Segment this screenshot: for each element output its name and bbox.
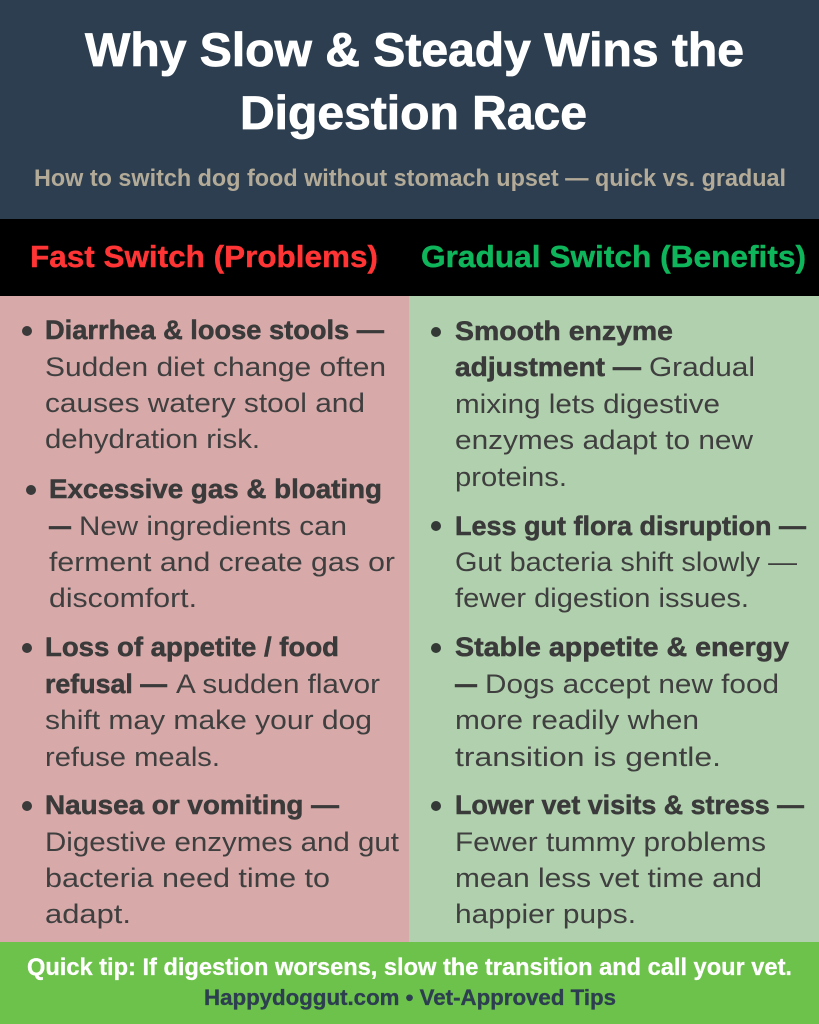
item: enzyme adjustment: enzymes adapt to new	[455, 425, 754, 455]
item: loss of appetite: A sudden flavor	[176, 669, 380, 699]
title: Digestion Race	[240, 86, 587, 139]
item: gut flora: fewer digestion issues.	[455, 583, 749, 613]
header panel	[0, 0, 819, 219]
item: gut flora	[431, 511, 806, 613]
item: loss of appetite: shift may make your dog	[45, 705, 372, 735]
item: diarrhea: Diarrhea & loose stools —	[45, 315, 384, 345]
column header band	[0, 219, 819, 296]
item: gas and bloating: ferment and create gas or	[49, 547, 395, 577]
item: gut flora: Less gut flora disruption —	[455, 511, 806, 541]
item: enzyme adjustment: mixing lets digestive	[455, 389, 720, 419]
item: vet visits: Fewer tummy problems	[455, 827, 766, 857]
item: gas and bloating: discomfort.	[49, 583, 197, 613]
title	[85, 23, 744, 139]
item: diarrhea: Sudden diet change often	[45, 352, 386, 382]
item: diarrhea: causes watery stool and	[45, 388, 365, 418]
item: loss of appetite	[22, 632, 380, 772]
footer panel	[0, 942, 819, 1024]
item: enzyme adjustment	[431, 316, 755, 492]
item: enzyme adjustment: adjustment —	[455, 352, 641, 382]
item: diarrhea: dehydration risk.	[45, 424, 260, 454]
item: gas and bloating	[26, 474, 395, 613]
item: vet visits	[431, 790, 804, 929]
item: gas and bloating: —	[49, 511, 71, 541]
item: vet visits: happier pups.	[455, 899, 636, 929]
item: enzyme adjustment: proteins.	[455, 462, 567, 492]
item: nausea	[22, 790, 400, 929]
quick tip: Quick tip: If digestion worsens, slow the transition and call your vet.	[27, 954, 792, 981]
subtitle: How to switch dog food without stomach upset — quick vs. gradual	[34, 165, 786, 192]
title: Why Slow & Steady Wins the	[85, 23, 744, 76]
panel: fast switch problems	[0, 296, 409, 942]
item: loss of appetite: refuse meals.	[45, 742, 220, 772]
item: stable appetite: transition is gentle.	[455, 742, 721, 772]
item: stable appetite: —	[455, 669, 477, 699]
item: stable appetite: Dogs accept new food	[485, 669, 779, 699]
item: stable appetite: Stable appetite & energy	[455, 632, 789, 662]
item: nausea: bacteria need time to	[45, 863, 330, 893]
item: nausea: adapt.	[45, 899, 131, 929]
item: enzyme adjustment: Gradual	[649, 352, 755, 382]
panel: gradual switch benefits	[409, 296, 819, 942]
item: nausea: Digestive enzymes and gut	[45, 827, 400, 857]
item: vet visits: Lower vet visits & stress —	[455, 790, 804, 820]
item: stable appetite: more readily when	[455, 705, 699, 735]
item: gas and bloating: Excessive gas & bloating	[49, 474, 382, 504]
item: vet visits: mean less vet time and	[455, 863, 762, 893]
item: loss of appetite: refusal —	[45, 669, 167, 699]
item: diarrhea	[22, 315, 386, 454]
footer credit: Happydoggut.com • Vet-Approved Tips	[204, 985, 616, 1010]
item: stable appetite	[431, 632, 789, 772]
heading: gradual switch: Gradual Switch (Benefits)	[421, 239, 806, 274]
item: gut flora: Gut bacteria shift slowly —	[455, 547, 797, 577]
item: gas and bloating: New ingredients can	[79, 511, 347, 541]
item: loss of appetite: Loss of appetite / food	[45, 632, 339, 662]
item: nausea: Nausea or vomiting —	[45, 790, 339, 820]
heading: fast switch: Fast Switch (Problems)	[30, 239, 378, 274]
item: enzyme adjustment: Smooth enzyme	[455, 316, 673, 346]
